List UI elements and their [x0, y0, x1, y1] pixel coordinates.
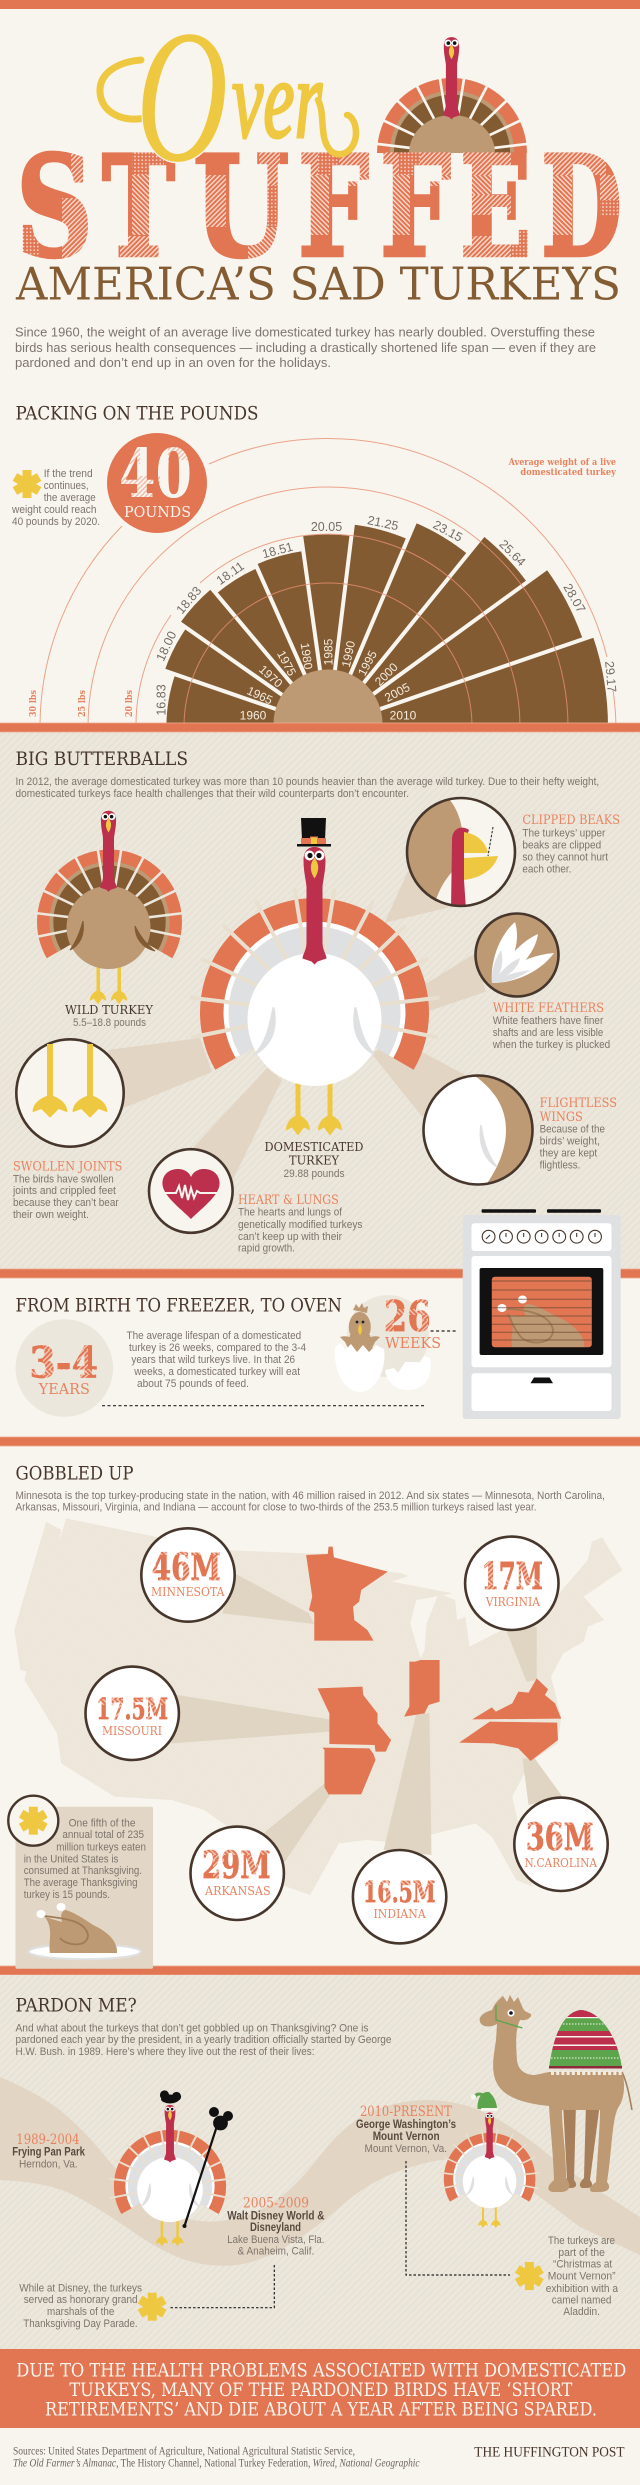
axis labels: 25 lbs	[78, 690, 88, 717]
badge: Indiana: 16.5M	[363, 1875, 436, 1909]
heart and lungs text: can’t keep up with their	[238, 1231, 342, 1243]
oven knobs	[482, 1230, 601, 1243]
hub	[274, 669, 382, 724]
axis labels: 30 lbs	[29, 690, 39, 717]
swollen joints text: because they can’t bear	[13, 1197, 119, 1209]
fact box: million turkeys eaten	[56, 1841, 146, 1853]
badge: Missouri: MISSOURI	[102, 1724, 162, 1738]
state beams	[171, 1573, 562, 1863]
26 weeks badge with hatching chick: 26	[384, 1292, 431, 1341]
domesticated label	[264, 1140, 364, 1180]
badge: Virginia	[465, 1537, 558, 1630]
wild turkey label	[65, 1003, 154, 1029]
value labels: 16.83	[154, 684, 168, 716]
trend note: weight could reach	[11, 504, 96, 516]
vernon note: camel named	[552, 2294, 611, 2306]
flightless wings text: Because of the	[540, 1124, 605, 1136]
flightless wings text: WINGS	[540, 1110, 583, 1125]
lifespan text: years that wild turkeys live. In that 26	[131, 1354, 295, 1366]
trend note: 40 pounds by 2020.	[12, 516, 100, 528]
callout: heart and lungs	[149, 1149, 233, 1233]
flightless wings text: flightless.	[540, 1160, 580, 1172]
heading: packing on the pounds: PACKING ON THE POUNDS	[16, 402, 258, 424]
badge: Minnesota: MINNESOTA	[151, 1585, 225, 1599]
clipped beaks text: so they cannot hurt	[522, 852, 608, 864]
wave path	[0, 2077, 640, 2266]
3-4 years badge	[16, 1319, 113, 1417]
badge: Indiana: INDIANA	[374, 1907, 426, 1921]
icon: asterisk disney	[138, 2293, 167, 2321]
badge: Missouri: 17.5M	[96, 1692, 168, 1726]
clipped beaks text: beaks are clipped	[522, 840, 601, 852]
panel: gobbled up	[8, 1462, 622, 1969]
orange divider bars	[0, 723, 640, 1975]
value labels: 28.07	[560, 581, 588, 615]
axis labels: 20 lbs	[125, 690, 135, 717]
heart and lungs text: HEART & LUNGS	[238, 1193, 339, 1208]
bars: weight by year	[165, 522, 608, 727]
header turkey	[377, 37, 527, 153]
chick	[340, 1303, 380, 1356]
clipped beaks text: The turkeys’ upper	[522, 828, 606, 840]
white feathers text: White feathers have finer	[493, 1015, 604, 1027]
wild turkey	[34, 811, 185, 1004]
clipped beaks text	[522, 813, 620, 875]
disney note: While at Disney, the turkeys	[19, 2282, 142, 2294]
badge: Virginia: 17M	[482, 1554, 543, 1598]
value labels: 18.11	[214, 559, 247, 588]
title: Over script	[100, 0, 356, 202]
26 weeks badge with hatching chick	[335, 1292, 441, 1392]
intro	[16, 776, 599, 800]
title: STUFFED	[16, 124, 622, 288]
sources: The Old Farmer’s Almanac, The History Channel, National Turkey Federation, Wired, National Geographic	[13, 2458, 420, 2470]
value labels: 18.00	[153, 629, 179, 663]
1989-2004 label: 1989-2004	[16, 2132, 80, 2148]
intro: Minnesota is the top turkey-producing state in the nation, with 46 million raised in 2012. And six states — Minnesota, North Carolina,	[16, 1490, 605, 1502]
disney note: Thanksgiving Day Parade.	[23, 2318, 138, 2330]
value labels: 23.15	[431, 518, 465, 545]
intro	[16, 2022, 392, 2058]
axis labels	[29, 690, 135, 717]
year labels: 1970	[256, 662, 286, 691]
oven rack	[492, 1281, 592, 1340]
heading: PARDON ME?	[16, 1994, 137, 2016]
camel	[480, 1995, 632, 2192]
wild turkey label: 5.5–18.8 pounds	[73, 1017, 146, 1029]
2010-present label: George Washington’s	[356, 2119, 456, 2131]
disney note: marshals of the	[47, 2306, 114, 2318]
badge: Minnesota: 46M	[152, 1545, 221, 1589]
lifespan text: The average lifespan of a domesticated	[126, 1330, 301, 1342]
disney note	[19, 2282, 142, 2330]
year labels: 2005	[382, 680, 413, 705]
domesticated label: 29.88 pounds	[284, 1168, 345, 1180]
disney note: served as honorary grand	[24, 2294, 138, 2306]
flightless wings text: FLIGHTLESS	[540, 1096, 617, 1111]
40 pounds badge: POUNDS	[124, 503, 191, 521]
intro: Arkansas, Missouri, Virginia, and Indiana — account for close to two-thirds of the 253.5 million turkeys raised last year.	[16, 1502, 536, 1514]
intro text: birds has serious health consequences — including a drastically shortened life span — even if they are	[15, 340, 596, 355]
panel: from birth to freezer	[16, 1292, 457, 1417]
intro	[16, 1490, 605, 1514]
mickey staff	[182, 2107, 233, 2228]
swollen joints text: SWOLLEN JOINTS	[13, 1160, 122, 1174]
value labels: 29.17	[602, 661, 619, 693]
title: STUFFED: F	[298, 124, 369, 288]
year labels: 1960	[240, 708, 267, 722]
2010-present label: Mount Vernon, Va.	[364, 2143, 447, 2155]
title: STUFFED: S	[16, 124, 93, 288]
year labels	[240, 638, 417, 722]
swollen joints text: joints and crippled feet	[12, 1185, 116, 1197]
lifespan text: turkey is 26 weeks, compared to the 3-4	[129, 1342, 306, 1354]
1989-2004 label: Herndon, Va.	[19, 2159, 78, 2171]
white feathers text	[492, 1001, 610, 1051]
dotted connectors	[169, 2161, 510, 2308]
oven	[463, 1209, 621, 1419]
badge: Virginia: VIRGINIA	[485, 1595, 540, 1609]
shell: back	[385, 1356, 431, 1390]
fact box: One fifth of the	[69, 1817, 136, 1829]
vernon note: Aladdin.	[563, 2306, 600, 2318]
white feathers text: shafts and are less visible	[493, 1027, 603, 1039]
chart note	[508, 457, 616, 478]
flightless wings text: they are kept	[540, 1148, 597, 1160]
year labels: 2010	[390, 708, 417, 722]
intro: And what about the turkeys that don’t get gobbled up on Thanksgiving? One is	[16, 2022, 369, 2034]
1989-2004 label: Frying Pan Park	[12, 2147, 85, 2159]
roast turkey on plate	[29, 1903, 141, 1959]
callout: swollen joints	[16, 1039, 124, 1147]
badge: Minnesota	[141, 1528, 235, 1622]
badge: Missouri	[86, 1667, 179, 1760]
2010-present label: 2010-PRESENT	[360, 2104, 452, 2120]
fact box: annual total of 235	[62, 1829, 144, 1841]
year labels: 1985	[322, 638, 336, 665]
panel: pardon me	[0, 1975, 640, 2349]
timeline dashes	[102, 1331, 457, 1406]
flightless wings text	[540, 1096, 617, 1172]
mount vernon turkey	[440, 2092, 540, 2228]
40 pounds badge	[107, 433, 207, 533]
conclusion banner: TURKEYS, MANY OF THE PARDONED BIRDS HAVE ‘SHORT	[69, 2380, 573, 2401]
trend note: continues,	[44, 480, 89, 492]
flightless wings text: birds’ weight,	[540, 1136, 600, 1148]
2010-present label: Mount Vernon	[373, 2131, 440, 2143]
lifespan text: weeks, a domesticated turkey will eat	[133, 1366, 300, 1378]
heading: GOBBLED UP	[16, 1462, 134, 1484]
heart and lungs text: genetically modified turkeys	[238, 1219, 363, 1231]
vernon note	[546, 2235, 619, 2318]
trend note: If the trend	[44, 468, 93, 480]
icon: asterisk	[13, 470, 41, 498]
heart and lungs text	[238, 1193, 363, 1255]
swollen joints text	[12, 1160, 122, 1221]
26 weeks badge with hatching chick: WEEKS	[385, 1334, 441, 1352]
2010-present label	[356, 2104, 456, 2155]
title: STUFFED: F	[380, 124, 451, 288]
year labels: 1965	[245, 683, 275, 708]
year labels: 2000	[372, 660, 401, 689]
swollen joints text: The birds have swollen	[13, 1173, 114, 1185]
2005-2009 label	[227, 2196, 324, 2258]
vernon note: The turkeys are	[548, 2235, 615, 2247]
trend note	[11, 468, 100, 528]
value labels: 18.51	[261, 540, 295, 561]
icon: asterisk vernon	[515, 2262, 544, 2290]
badge: North Carolina: 36M	[526, 1815, 594, 1859]
fact box: turkey is 15 pounds.	[24, 1889, 110, 1901]
heart and lungs text: rapid growth.	[238, 1243, 295, 1255]
title: STUFFED: T	[102, 124, 175, 288]
2005-2009 label: Lake Buena Vista, Fla.	[227, 2234, 324, 2246]
vernon note: part of the	[558, 2247, 605, 2259]
year labels: 1995	[355, 648, 380, 678]
value labels: 25.64	[496, 537, 528, 569]
lifespan text	[126, 1330, 306, 1390]
swollen joints text: their own weight.	[13, 1209, 89, 1221]
domesticated turkey	[190, 818, 440, 1136]
sources: Sources: United States Department of Agriculture, National Agricultural Statistic Service,	[13, 2446, 355, 2458]
clipped beaks text: each other.	[522, 863, 571, 875]
title: STUFFED: U	[193, 124, 289, 288]
2005-2009 label: & Anaheim, Calif.	[238, 2246, 314, 2258]
wild turkey label: WILD TURKEY	[65, 1003, 154, 1017]
intro text: pardoned and don’t end up in an oven for the holidays.	[15, 355, 331, 370]
badge: Arkansas: 29M	[202, 1843, 271, 1887]
badge: Indiana	[353, 1850, 446, 1943]
title: STUFFED: E	[460, 124, 531, 288]
heading: BIG BUTTERBALLS	[16, 748, 188, 770]
fact box: The average Thanksgiving	[24, 1877, 138, 1889]
clipped beaks text: CLIPPED BEAKS	[522, 813, 620, 828]
fact box: in the United States is	[24, 1853, 119, 1865]
panel: big butterballs	[0, 732, 640, 1269]
value labels: 20.05	[311, 520, 342, 534]
callout: flightless wings	[422, 1074, 534, 1186]
value labels	[153, 513, 619, 716]
intro: domesticated turkeys face health challenges that their wild counterparts don’t encounter.	[16, 788, 409, 800]
mickey hat	[160, 2090, 181, 2104]
badge: North Carolina	[514, 1798, 608, 1891]
pilgrim hat	[297, 818, 331, 846]
subtitle: AMERICA’S SAD TURKEYS	[15, 258, 621, 310]
white feathers text: WHITE FEATHERS	[493, 1001, 604, 1016]
callout: white feathers	[476, 914, 558, 996]
white feathers text: when the turkey is plucked	[492, 1039, 610, 1051]
domesticated label: TURKEY	[289, 1154, 340, 1168]
vernon note: “Christmas at	[553, 2259, 612, 2271]
huffington post credit: THE HUFFINGTON POST	[474, 2444, 625, 2460]
domesticated label: DOMESTICATED	[264, 1140, 364, 1154]
camel blanket	[549, 2010, 622, 2066]
vernon note: Mount Vernon”	[548, 2271, 616, 2283]
heading: FROM BIRTH TO FREEZER, TO OVEN	[16, 1294, 342, 1316]
2005-2009 label: Disneyland	[250, 2222, 301, 2234]
year labels: 1990	[339, 639, 358, 669]
heart and lungs text: The hearts and lungs of	[238, 1207, 343, 1219]
chart note: domesticated turkey	[520, 467, 616, 478]
intro: In 2012, the average domesticated turkey was more than 10 pounds heavier than the average wild turkey. Due to their hefty weight,	[16, 776, 599, 788]
title: Over script: ver	[232, 38, 322, 162]
sources	[13, 2446, 420, 2470]
intro text: Since 1960, the weight of an average live domesticated turkey has nearly doubled. Overstuffing these	[15, 324, 595, 340]
3-4 years badge: YEARS	[38, 1380, 90, 1398]
chart note: Average weight of a live	[508, 457, 616, 468]
conclusion banner	[0, 2349, 640, 2428]
value labels: 18.83	[174, 584, 204, 617]
badge: Arkansas	[190, 1827, 284, 1920]
callout beams	[108, 871, 486, 1180]
year labels: 1975	[274, 648, 299, 679]
40 pounds badge: 40	[119, 434, 192, 513]
intro: H.W. Bush. in 1989. Here’s where they live out the rest of their lives:	[16, 2046, 314, 2058]
lifespan text: about 75 pounds of feed.	[137, 1378, 249, 1390]
shell: front	[335, 1343, 384, 1392]
disney turkey	[109, 2090, 233, 2246]
roasting turkey	[498, 1296, 584, 1347]
callout: clipped beaks	[406, 796, 516, 908]
1989-2004 label	[12, 2132, 85, 2171]
intro text	[15, 324, 596, 370]
vernon note: exhibition with a	[546, 2283, 619, 2295]
badge: Arkansas: ARKANSAS	[204, 1884, 271, 1898]
fact box	[8, 1796, 153, 1969]
top bar	[0, 0, 640, 9]
intro: pardoned each year by the president, in a yearly tradition officially started by George	[16, 2034, 392, 2046]
2005-2009 label: Walt Disney World &	[227, 2210, 324, 2222]
2005-2009 label: 2005-2009	[243, 2196, 309, 2212]
3-4 years badge: 3-4	[29, 1339, 98, 1389]
badge: North Carolina: N.CAROLINA	[524, 1856, 597, 1870]
radial weight chart	[29, 438, 619, 727]
trend note: the average	[44, 492, 96, 504]
states	[306, 1547, 561, 1794]
santa hat	[471, 2092, 498, 2111]
map: United States	[14, 1518, 622, 1895]
fact box: consumed at Thanksgiving.	[24, 1865, 142, 1877]
year labels: 1980	[298, 642, 315, 671]
value labels: 21.25	[366, 513, 400, 533]
